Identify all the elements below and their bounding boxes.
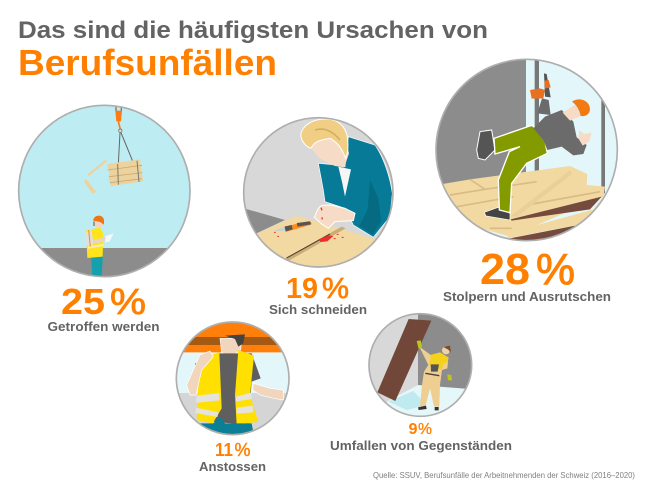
percentage: 19 %: % xyxy=(322,273,349,305)
percentage: 25 %: % xyxy=(110,281,146,322)
panel: Stolpern und Ausrutschen xyxy=(430,50,623,304)
panel: Umfallen von Gegenständen xyxy=(330,305,512,453)
percentage: 25 %: 25 xyxy=(61,281,105,322)
illustration: worker hitting a beam xyxy=(176,321,290,436)
panel: Anstossen xyxy=(176,321,290,471)
illustration: woman with cut finger xyxy=(242,116,394,268)
percentage: 11 %: % xyxy=(234,440,250,460)
percentage: 28 % xyxy=(480,245,575,294)
label: Stolpern und Ausrutschen: Stolpern und Ausrutschen xyxy=(443,289,611,304)
percentage: 28 %: % xyxy=(536,245,575,294)
percentage: 11 %: 11 xyxy=(215,440,233,460)
label: Umfallen von Gegenständen: Umfallen von Gegenständen xyxy=(330,438,512,453)
percentage: 11 % xyxy=(215,440,250,460)
label: Getroffen werden: Getroffen werden xyxy=(48,319,160,334)
panel: Sich schneiden xyxy=(242,116,394,314)
percentage: 9 %: % xyxy=(418,421,432,438)
percentage: 25 % xyxy=(61,281,146,322)
illustration: worker slipping on boards xyxy=(435,58,618,242)
percentage: 19 % xyxy=(286,273,349,305)
percentage: 9 %: 9 xyxy=(408,421,418,438)
percentage: 9 % xyxy=(408,421,432,438)
percentage: 28 %: 28 xyxy=(480,245,530,294)
title xyxy=(18,17,488,83)
panel: Getroffen werden xyxy=(18,104,191,331)
title: Das sind die häufigsten Ursachen von xyxy=(18,17,488,44)
percentage: 19 %: 19 xyxy=(286,273,318,305)
title: Berufsunfällen xyxy=(18,42,277,83)
illustration: falling board and worker xyxy=(368,312,472,418)
illustration: falling load from crane xyxy=(18,104,191,278)
label: Sich schneiden: Sich schneiden xyxy=(269,302,367,317)
label: Anstossen: Anstossen xyxy=(199,459,266,474)
